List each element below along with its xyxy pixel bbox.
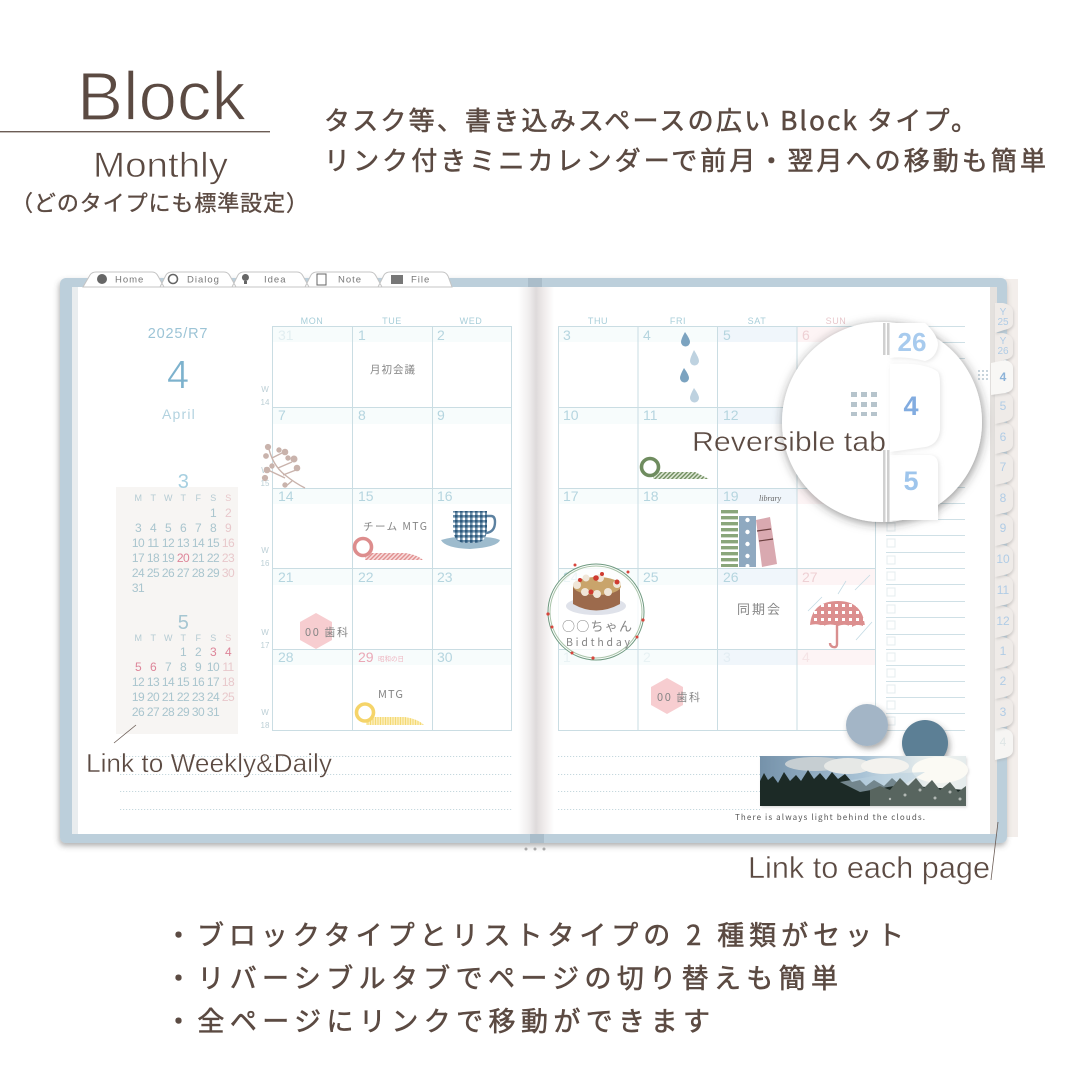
right calendar grid: 12 <box>723 407 739 423</box>
top navigation tabs: Idea <box>264 274 286 286</box>
small grid icon <box>978 370 988 380</box>
feature list <box>165 914 904 1039</box>
photo caption: There is always light behind the clouds. <box>735 812 925 823</box>
mini calendars: W <box>164 633 173 643</box>
headline text <box>324 101 1046 178</box>
heading rule <box>0 131 270 132</box>
mini calendars: 27 <box>147 705 160 719</box>
sticker: second pink hexagon <box>651 678 683 714</box>
cover spine shading <box>528 278 542 287</box>
right calendar grid: 10 <box>563 407 579 423</box>
color swatch: dark blue <box>902 720 948 766</box>
mini calendars: 25 <box>147 566 160 580</box>
month tabs: 3 <box>1000 705 1007 719</box>
note: MTG: MTG <box>378 686 403 702</box>
left calendar grid <box>272 316 512 731</box>
mini calendars: 16 <box>192 675 205 689</box>
mini calendars: 17 <box>207 675 220 689</box>
right calendar grid: 17 <box>563 488 579 504</box>
mini calendars: 17 <box>132 551 145 565</box>
mini calendars <box>116 471 238 734</box>
top navigation tabs: Home <box>115 274 144 286</box>
mini calendars: 7 <box>195 521 202 535</box>
memo lines <box>120 756 760 810</box>
note: second 歯科: 00 歯科 <box>657 689 700 705</box>
left calendar grid: 9 <box>437 407 445 423</box>
mini calendars: 4 <box>225 645 232 659</box>
month tabs: 9 <box>1000 521 1007 535</box>
right calendar grid: 26 <box>723 569 739 585</box>
month tabs: 10 <box>996 552 1010 566</box>
week numbers: W <box>261 546 269 555</box>
week numbers: W <box>261 466 269 475</box>
mini calendars: T <box>181 633 187 643</box>
magnified tab 4: 4 <box>903 391 919 421</box>
mini calendars: 1 <box>210 506 217 520</box>
right calendar grid: 27 <box>802 569 818 585</box>
mini calendars: 2 <box>225 506 232 520</box>
mini calendars: 20 <box>147 690 160 704</box>
week numbers: W <box>261 385 269 394</box>
mini calendars: 4 <box>150 521 157 535</box>
mini calendars: S <box>225 493 231 503</box>
month tabs: 1 <box>1000 644 1007 658</box>
mini calendars: 29 <box>207 566 220 580</box>
magnified tab 26 <box>890 323 938 361</box>
mini calendars: T <box>151 633 157 643</box>
left calendar grid: 1 <box>358 327 366 343</box>
mini calendars: 15 <box>177 675 190 689</box>
mini calendars: W <box>164 493 173 503</box>
mini calendars: 10 <box>207 660 220 674</box>
mini calendars: T <box>151 493 157 503</box>
mini calendars: 24 <box>132 566 145 580</box>
magnified page edge upper <box>883 323 890 355</box>
mini calendars: 9 <box>195 660 202 674</box>
left calendar grid: TUE <box>382 316 402 326</box>
left calendar grid: 15 <box>358 488 374 504</box>
mini calendars: 13 <box>147 675 160 689</box>
week numbers: 18 <box>261 721 270 730</box>
magnified tab 26: 26 <box>898 327 926 357</box>
right calendar grid: THU <box>588 316 608 326</box>
month tabs: 7 <box>1000 460 1007 474</box>
sticker: green washi tape <box>642 458 709 479</box>
sticker: birthday wreath and cake <box>546 564 645 660</box>
headline text: リンク付きミニカレンダーで前月・翌月への移動も簡単 <box>324 141 1046 178</box>
headline text: タスク等、書き込みスペースの広い Block タイプ。 <box>324 101 977 138</box>
mini calendars: M <box>135 493 142 503</box>
right calendar grid: 5 <box>723 327 731 343</box>
mini calendars: 3 <box>210 645 217 659</box>
right calendar grid: 3 <box>723 649 731 665</box>
magnified grid icon <box>851 392 877 416</box>
note: 月初会議: 月初会議 <box>370 362 416 377</box>
top navigation tabs: Note <box>338 274 362 286</box>
photo banner <box>760 756 968 806</box>
callout: reversible tab: Reversible tab <box>692 426 886 457</box>
spine dots <box>524 848 546 850</box>
month tabs: 25 <box>997 317 1009 328</box>
left calendar grid: 30 <box>437 649 453 665</box>
mini calendars: 29 <box>177 705 190 719</box>
mini calendars: 28 <box>192 566 205 580</box>
top navigation tabs: File <box>411 274 430 286</box>
left calendar grid: 16 <box>437 488 453 504</box>
callout leader: each page <box>991 822 998 880</box>
left page header: year and month: 2025/R7 <box>148 326 208 342</box>
mini calendars: 18 <box>147 551 160 565</box>
left calendar grid: 28 <box>278 649 294 665</box>
mini calendars: 3 <box>135 521 142 535</box>
week numbers: 15 <box>261 479 270 488</box>
mini calendars: 11 <box>222 660 235 674</box>
sticker: yellow washi tape <box>356 704 424 725</box>
sticker: washi tape books: library <box>759 494 782 503</box>
top navigation tabs <box>83 272 452 287</box>
right calendar grid: 4 <box>802 649 810 665</box>
right calendar grid <box>558 316 876 731</box>
right calendar grid: 24 <box>563 569 579 585</box>
mini calendars: 30 <box>192 705 205 719</box>
page edges <box>72 287 78 834</box>
mini calendars: 5 <box>165 521 172 535</box>
left calendar grid: 2 <box>437 327 445 343</box>
mini calendars: 26 <box>132 705 145 719</box>
left page header: year and month: 4 <box>167 353 189 397</box>
mini calendars: 12 <box>132 675 145 689</box>
mini calendars: 30 <box>222 566 235 580</box>
month tabs: 5 <box>1000 399 1007 413</box>
callout: link to weekly and daily: Link to Weekly&Daily <box>86 748 332 778</box>
mini calendars: 10 <box>132 536 145 550</box>
tab strip background <box>1005 279 1018 837</box>
left calendar grid: 22 <box>358 569 374 585</box>
right calendar grid: 18 <box>643 488 659 504</box>
week numbers: 14 <box>261 398 270 407</box>
month tabs: Y <box>1000 307 1007 318</box>
left calendar grid: 23 <box>437 569 453 585</box>
mini calendars: 18 <box>222 675 235 689</box>
mini calendars: S <box>210 493 216 503</box>
mini calendars: 23 <box>222 551 235 565</box>
mini calendars: 5 <box>178 612 189 634</box>
callout: link to each page: Link to each page <box>748 850 990 885</box>
mini calendars: 21 <box>162 690 175 704</box>
right calendar grid: 19 <box>723 488 739 504</box>
mini calendars: 31 <box>132 581 145 595</box>
mini calendars: 8 <box>180 660 187 674</box>
magnified tab 5: 5 <box>903 466 919 496</box>
right calendar grid: SUN <box>826 316 846 326</box>
right calendar grid: 3 <box>563 327 571 343</box>
left calendar grid: 31 <box>278 327 294 343</box>
mini calendars: 28 <box>162 705 175 719</box>
mini calendars: 6 <box>180 521 187 535</box>
sticker: umbrella and rain <box>808 575 872 647</box>
month tabs <box>991 303 1013 760</box>
right calendar grid: SAT <box>748 316 766 326</box>
mini calendars: 22 <box>177 690 190 704</box>
mini calendars: 15 <box>207 536 220 550</box>
mini calendars: 27 <box>177 566 190 580</box>
left calendar grid: WED <box>460 316 482 326</box>
sticker: red washi tape <box>354 538 423 560</box>
mini calendars: M <box>135 633 142 643</box>
mini calendars: 24 <box>207 690 220 704</box>
magnified tab 5 <box>890 455 938 520</box>
mini calendars: 13 <box>177 536 190 550</box>
magnifier <box>782 322 982 522</box>
sticker: washi tape books <box>721 494 782 568</box>
mini calendars: 9 <box>225 521 232 535</box>
month tabs: 6 <box>1000 430 1007 444</box>
mini calendars: 12 <box>162 536 175 550</box>
right calendar grid: 2 <box>643 649 651 665</box>
cover spine shading bottom <box>530 834 544 843</box>
book cover <box>60 278 1007 843</box>
week numbers <box>261 385 270 730</box>
month tabs: 4 <box>1000 370 1007 384</box>
mini calendars: 22 <box>207 551 220 565</box>
mini calendars: 19 <box>132 690 145 704</box>
sticker: branch <box>263 445 305 488</box>
mini calendars: 1 <box>180 645 187 659</box>
mini calendars: S <box>225 633 231 643</box>
color swatch: light blue <box>846 704 888 746</box>
mini calendars: 14 <box>192 536 205 550</box>
mini calendars: 8 <box>210 521 217 535</box>
mini calendars: 20 <box>177 551 190 565</box>
right calendar grid: 25 <box>643 569 659 585</box>
left calendar grid: 7 <box>278 407 286 423</box>
mini calendars: F <box>196 493 202 503</box>
magnified page edge lower <box>883 450 890 522</box>
mini calendars: 11 <box>147 536 160 550</box>
subtitle: Monthly: Monthly <box>93 146 229 185</box>
mini calendars: 25 <box>222 690 235 704</box>
mini calendars: 14 <box>162 675 175 689</box>
callout leader: weekly <box>114 725 136 743</box>
feature list: ・ブロックタイプとリストタイプの 2 種類がセット <box>165 914 904 953</box>
week numbers: 16 <box>261 559 270 568</box>
planner book <box>60 272 1018 850</box>
right calendar grid: 4 <box>643 327 651 343</box>
mini calendars: F <box>196 633 202 643</box>
pages <box>78 287 990 834</box>
feature list: ・リバーシブルタブでページの切り替えも簡単 <box>165 957 838 996</box>
left calendar grid: 29 <box>358 649 374 665</box>
sticker: rain drops <box>680 332 699 402</box>
left page header: year and month: April <box>162 406 196 422</box>
month tabs: Y <box>1000 336 1007 347</box>
center gutter <box>518 287 554 834</box>
sticker: birthday wreath and cake: Bidthday <box>566 635 631 650</box>
left calendar grid: 21 <box>278 569 294 585</box>
mini calendars: T <box>181 493 187 503</box>
left calendar grid: 14 <box>278 488 294 504</box>
left calendar grid: 昭和の日 <box>378 653 404 663</box>
left calendar grid: MON <box>301 316 323 326</box>
left calendar grid: 8 <box>358 407 366 423</box>
mini calendars: 21 <box>192 551 205 565</box>
month tabs: 26 <box>997 346 1009 357</box>
week numbers: W <box>261 708 269 717</box>
mini calendars: 23 <box>192 690 205 704</box>
sticker: pink hexagon <box>300 613 332 649</box>
note: 歯科: 00 歯科 <box>305 624 348 640</box>
sticker: birthday wreath and cake: ○○ちゃん <box>562 616 632 635</box>
right calendar grid: 1 <box>563 649 571 665</box>
right calendar grid: 6 <box>802 327 810 343</box>
mini calendars: 31 <box>207 705 220 719</box>
mini calendars: 7 <box>165 660 172 674</box>
month tabs: 4 <box>1000 735 1007 749</box>
mini calendars: 6 <box>150 660 157 674</box>
title: Block: Block <box>77 58 246 135</box>
week numbers: 17 <box>261 641 270 650</box>
sticker: gingham cup <box>441 511 500 549</box>
note: 同期会: 同期会 <box>737 599 780 618</box>
mini calendars: 16 <box>222 536 235 550</box>
month tabs: 11 <box>997 583 1010 597</box>
feature list: ・全ページにリンクで移動ができます <box>165 1000 710 1039</box>
right calendar grid: 11 <box>643 407 658 423</box>
week numbers: W <box>261 628 269 637</box>
month tabs: 8 <box>1000 491 1007 505</box>
month tabs: 12 <box>996 614 1010 628</box>
mini calendars: 5 <box>135 660 142 674</box>
mini calendars: 3 <box>178 471 189 493</box>
right task list <box>886 326 965 730</box>
mini calendars: S <box>210 633 216 643</box>
right page edge <box>990 287 997 834</box>
mini calendars: 2 <box>195 645 202 659</box>
subtitle note: （どのタイプにも標準設定） <box>11 186 308 218</box>
mini calendars: 26 <box>162 566 175 580</box>
mini calendars: 19 <box>162 551 175 565</box>
right calendar grid: FRI <box>670 316 686 326</box>
note: チーム MTG: チーム MTG <box>363 519 427 534</box>
magnified tab 4 <box>890 364 940 452</box>
left page header: year and month <box>148 326 208 422</box>
month tabs: 2 <box>1000 674 1007 688</box>
top navigation tabs: Dialog <box>187 274 220 286</box>
